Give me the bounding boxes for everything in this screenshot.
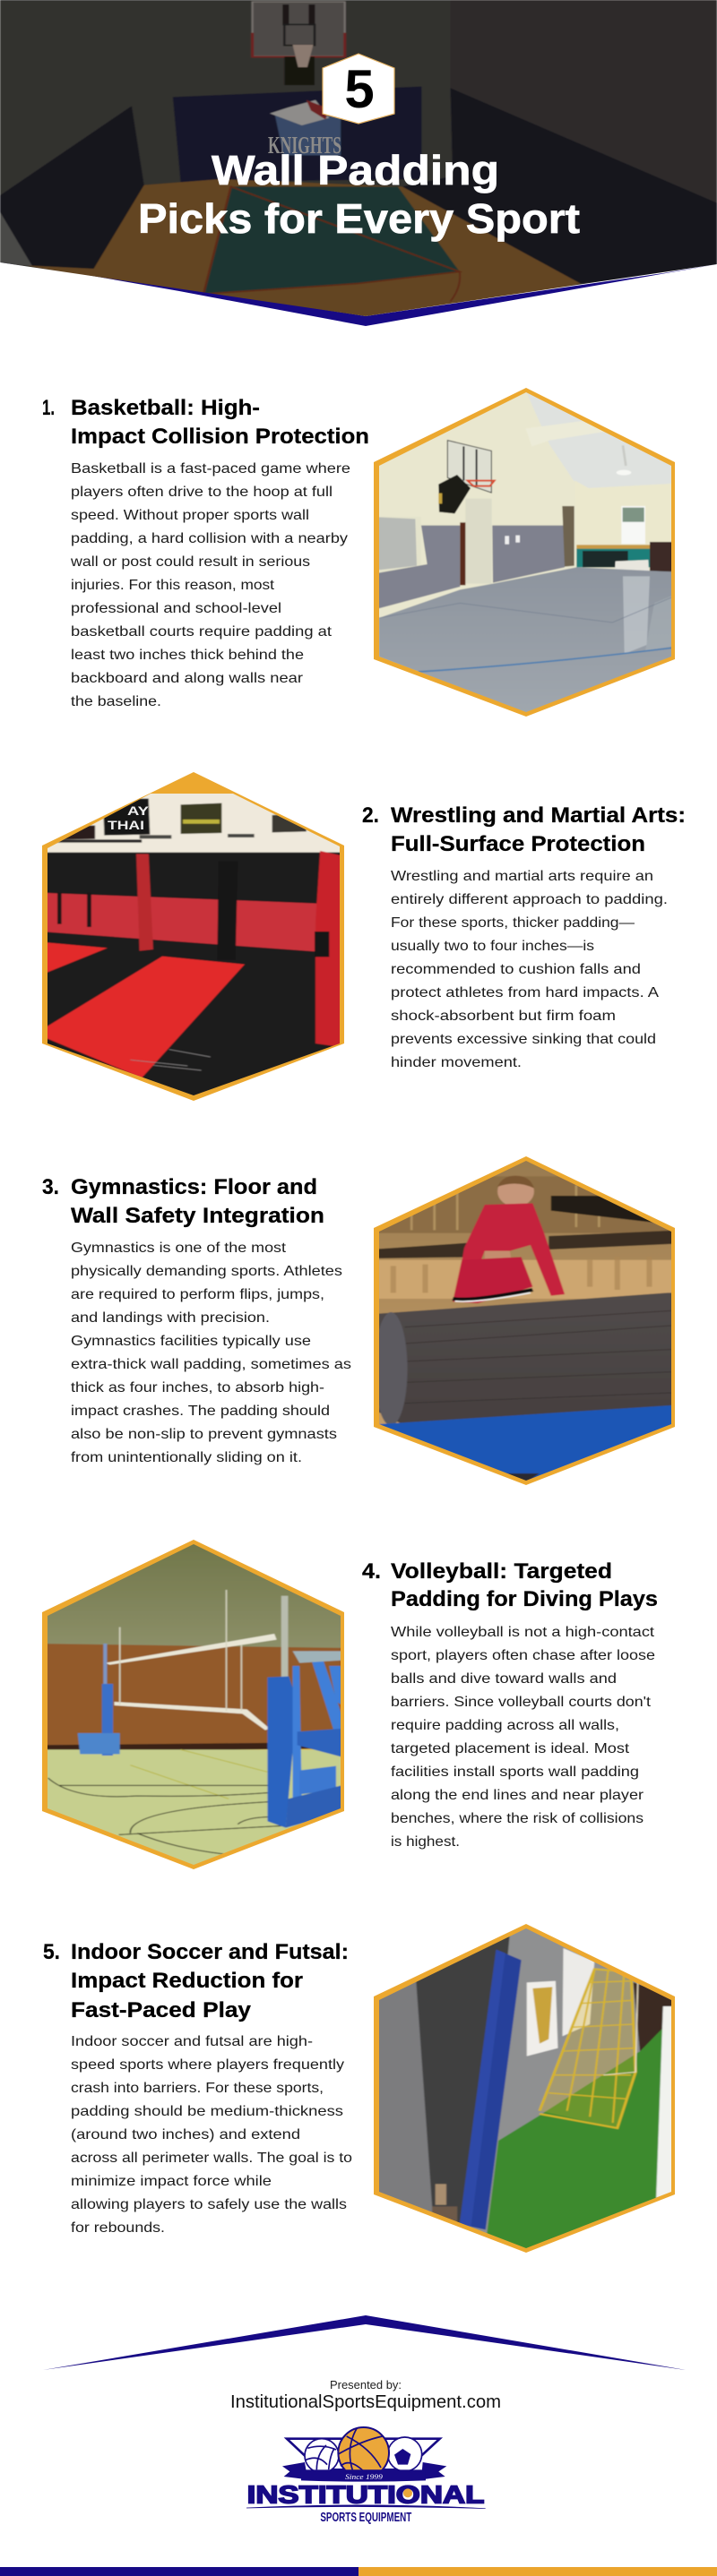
photo hexagon: gym with grey wall padding bbox=[374, 388, 675, 717]
ribbon: since 1999 bbox=[282, 2462, 446, 2482]
body text: basketball: speed. Without proper sports wall bbox=[71, 508, 309, 523]
heading: soccer bbox=[43, 1940, 349, 2022]
body text: volleyball bbox=[391, 1625, 655, 1850]
heading: basketball bbox=[42, 396, 369, 449]
photo lettering: Knights: KNIGHTS bbox=[268, 132, 341, 159]
body text: soccer: for rebounds. bbox=[71, 2220, 165, 2236]
body text: gymnastics bbox=[71, 1241, 351, 1465]
ribbon: since 1999: Since 1999 bbox=[345, 2473, 384, 2481]
body text: soccer: padding should be medium-thickness bbox=[71, 2104, 343, 2119]
presenter credit bbox=[230, 2378, 501, 2412]
panel: volleyball bbox=[41, 1538, 658, 1869]
body text: volleyball: facilities install sports wall padding bbox=[391, 1765, 639, 1780]
body text: basketball bbox=[70, 461, 350, 709]
logo: Institutional Sports Equipment bbox=[246, 2427, 486, 2525]
heading: soccer: Indoor Soccer and Futsal: bbox=[71, 1940, 349, 1964]
body text: gymnastics: Gymnastics facilities typically use bbox=[71, 1334, 311, 1349]
poster lettering: Muay Thai: THAI bbox=[108, 818, 144, 832]
body text: soccer bbox=[71, 2034, 352, 2236]
body text: basketball: Basketball is a fast-paced game where bbox=[71, 461, 350, 477]
body text: basketball: least two inches thick behind the bbox=[71, 648, 304, 663]
body text: wrestling: shock-absorbent but firm foam bbox=[391, 1009, 616, 1024]
heading: gymnastics: 3. bbox=[42, 1175, 59, 1199]
photo hexagon: martial arts gym bbox=[41, 772, 348, 1102]
body text: basketball: injuries. For this reason, most bbox=[71, 578, 275, 593]
photo hexagon: woman rolling gym mat bbox=[370, 1153, 681, 1487]
background photo: darkened gym bbox=[0, 0, 717, 329]
heading: wrestling: 2. bbox=[362, 803, 379, 828]
panel: gymnastics bbox=[42, 1153, 681, 1487]
heading: wrestling: Full-Surface Protection bbox=[391, 832, 645, 856]
body text: soccer: crash into barriers. For these sports, bbox=[71, 2081, 324, 2096]
divider chevron: header navy bbox=[0, 262, 717, 326]
divider chevron: footer navy bbox=[43, 2315, 686, 2370]
body text: soccer: Indoor soccer and futsal are high- bbox=[71, 2034, 313, 2049]
heading: soccer: Fast-Paced Play bbox=[71, 1998, 252, 2022]
heading: volleyball: 4. bbox=[362, 1559, 381, 1584]
body text: gymnastics: also be non-slip to prevent gymnasts bbox=[71, 1427, 337, 1442]
body text: soccer: across all perimeter walls. The goal is to bbox=[71, 2151, 352, 2166]
heading: wrestling: Wrestling and Martial Arts: bbox=[391, 803, 686, 828]
body text: wrestling: For these sports, thicker padding— bbox=[391, 915, 635, 931]
body text: basketball: professional and school-level bbox=[71, 601, 281, 616]
body text: volleyball: balls and dive toward walls and bbox=[391, 1671, 617, 1687]
title: Wall Padding bbox=[212, 147, 499, 193]
body text: basketball: basketball courts require padding at bbox=[71, 624, 333, 640]
body text: gymnastics: and landings with precision. bbox=[71, 1310, 270, 1326]
wordmark: Sports Equipment: SPORTS EQUIPMENT bbox=[320, 2511, 411, 2525]
body text: basketball: backboard and along walls near bbox=[71, 671, 304, 686]
body text: gymnastics: are required to perform flips, jumps, bbox=[71, 1287, 324, 1302]
heading: soccer: 5. bbox=[43, 1940, 60, 1964]
body text: volleyball: While volleyball is not a high-contact bbox=[391, 1625, 655, 1640]
photo hexagon: volleyball net in gym bbox=[41, 1538, 348, 1869]
footer bbox=[0, 2315, 717, 2576]
heading: volleyball: Padding for Diving Plays bbox=[391, 1587, 658, 1611]
title bbox=[138, 147, 580, 242]
body text: volleyball: barriers. Since volleyball courts don't bbox=[391, 1695, 652, 1710]
body text: basketball: players often drive to the hoop at full bbox=[71, 485, 333, 500]
body text: wrestling: hinder movement. bbox=[391, 1055, 522, 1070]
heading: basketball: Impact Collision Protection bbox=[71, 425, 369, 449]
body text: basketball: padding, a hard collision with a nearby bbox=[71, 531, 348, 546]
heading: wrestling bbox=[362, 803, 686, 856]
body text: soccer: minimize impact force while bbox=[71, 2174, 272, 2189]
heading: volleyball bbox=[362, 1559, 658, 1611]
poster lettering: Muay Thai: AY bbox=[127, 803, 150, 818]
body text: wrestling: protect athletes from hard impacts. A bbox=[391, 985, 659, 1000]
body text: wrestling: usually two to four inches—is bbox=[391, 939, 594, 954]
title: Picks for Every Sport bbox=[138, 195, 580, 242]
icon: volleyball bbox=[305, 2439, 339, 2473]
icon: basketball bbox=[337, 2426, 390, 2470]
body text: volleyball: require padding across all walls, bbox=[391, 1718, 619, 1733]
body text: wrestling: entirely different approach to padding. bbox=[391, 892, 668, 907]
body text: volleyball: sport, players often chase after loose bbox=[391, 1648, 655, 1663]
body text: gymnastics: physically demanding sports. Athletes bbox=[71, 1264, 342, 1279]
wordmark: Institutional: INSTITUTIONAL bbox=[247, 2480, 484, 2508]
body text: basketball: wall or post could result in serious bbox=[70, 554, 310, 570]
presenter credit: Presented by: bbox=[330, 2378, 402, 2391]
heading: basketball: 1. bbox=[42, 396, 55, 420]
heading: gymnastics: Wall Safety Integration bbox=[71, 1204, 324, 1228]
presenter credit: InstitutionalSportsEquipment.com bbox=[230, 2392, 501, 2412]
icon: soccer ball bbox=[388, 2437, 422, 2471]
body text: volleyball: targeted placement is ideal. Most bbox=[391, 1741, 630, 1756]
body text: wrestling: Wrestling and martial arts require an bbox=[391, 869, 653, 884]
heading: basketball: Basketball: High- bbox=[71, 396, 260, 420]
body text: wrestling bbox=[391, 869, 668, 1070]
panel: indoor soccer and futsal bbox=[43, 1923, 681, 2253]
body text: soccer: allowing players to safely use the walls bbox=[71, 2197, 347, 2212]
poster lettering: Muay Thai bbox=[108, 806, 149, 829]
body text: gymnastics: impact crashes. The padding should bbox=[71, 1404, 330, 1419]
badge: number 5 hexagon bbox=[323, 54, 394, 124]
heading: gymnastics: Gymnastics: Floor and bbox=[71, 1175, 317, 1199]
body text: soccer: speed sports where players frequently bbox=[71, 2057, 344, 2073]
panel: wrestling and martial arts bbox=[41, 772, 686, 1102]
body text: volleyball: is highest. bbox=[391, 1834, 460, 1850]
heading: volleyball: Volleyball: Targeted bbox=[391, 1559, 612, 1584]
body text: volleyball: benches, where the risk of collisions bbox=[391, 1811, 644, 1826]
body text: gymnastics: thick as four inches, to absorb high- bbox=[71, 1380, 324, 1395]
body text: gymnastics: from unintentionally sliding on it. bbox=[71, 1450, 302, 1465]
badge: number 5 hexagon: 5 bbox=[344, 59, 375, 119]
heading: gymnastics bbox=[42, 1175, 324, 1228]
header banner bbox=[0, 0, 717, 329]
photo hexagon: padded post by indoor turf bbox=[370, 1923, 681, 2253]
panel: basketball bbox=[42, 388, 675, 717]
body text: basketball: the baseline. bbox=[71, 694, 161, 709]
body text: volleyball: along the end lines and near player bbox=[391, 1788, 644, 1803]
body text: gymnastics: Gymnastics is one of the most bbox=[71, 1241, 287, 1256]
body text: soccer: (around two inches) and extend bbox=[71, 2127, 300, 2142]
bottom colour bar bbox=[0, 2567, 717, 2576]
body text: gymnastics: extra-thick wall padding, sometimes as bbox=[71, 1357, 351, 1372]
heading: soccer: Impact Reduction for bbox=[71, 1969, 303, 1993]
body text: wrestling: recommended to cushion falls and bbox=[391, 962, 641, 977]
body text: wrestling: prevents excessive sinking that could bbox=[391, 1032, 656, 1047]
